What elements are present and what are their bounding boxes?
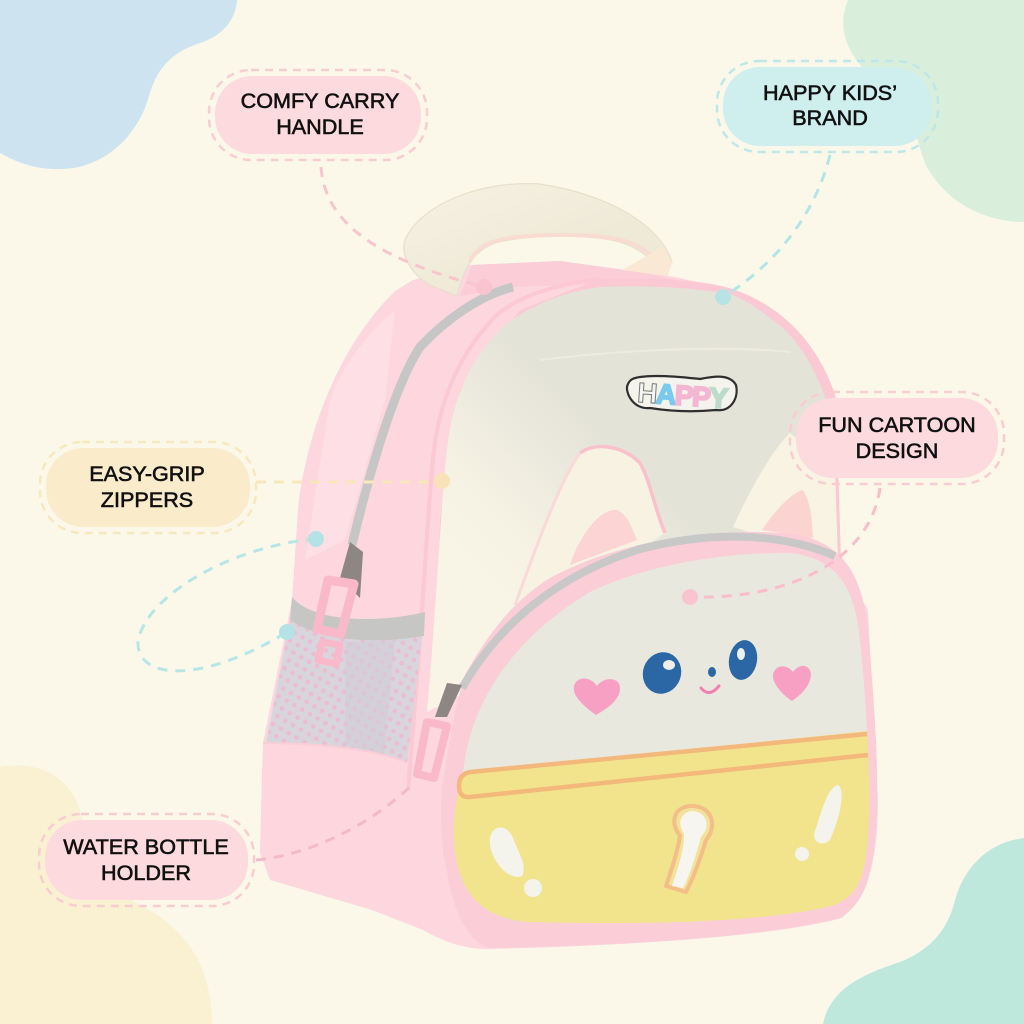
pocket yellow band — [454, 731, 869, 923]
callout: happy kids brand: BRAND — [792, 105, 868, 130]
highlights left — [490, 828, 542, 897]
callout leader: cartoon design — [682, 488, 880, 605]
pocket orange stripes — [459, 734, 868, 797]
callout: easy-grip zippers — [40, 442, 256, 533]
callout: water bottle holder — [39, 814, 254, 906]
main front panel — [427, 286, 838, 712]
callout leader: handle — [321, 167, 492, 295]
pocket zipper — [462, 537, 835, 688]
callout: comfy carry handle — [209, 70, 427, 160]
callout leader: zippers — [256, 473, 450, 489]
callout: comfy carry handle: HANDLE — [276, 114, 364, 139]
handle — [404, 184, 672, 296]
callout: water bottle holder: WATER BOTTLE — [63, 834, 229, 859]
main zipper — [352, 287, 513, 545]
callout leader: water bottle — [256, 785, 412, 860]
callout leader: brand — [715, 155, 830, 305]
background blob: top left blue — [0, 0, 237, 169]
callout: fun cartoon design: FUN CARTOON — [818, 412, 976, 437]
keyhole — [666, 806, 712, 892]
side fold highlights — [305, 310, 395, 560]
callout: water bottle holder: HOLDER — [101, 860, 191, 885]
face: mouth — [701, 686, 719, 693]
callout: fun cartoon design — [790, 392, 1004, 484]
side mesh pocket — [260, 597, 425, 910]
callout: happy kids brand: HAPPY KIDS’ — [763, 80, 897, 105]
zipper pull upper — [317, 542, 363, 664]
body silhouette — [260, 261, 878, 949]
callout leader: mesh loop — [138, 531, 324, 671]
backpack illustration — [260, 184, 878, 949]
callout: happy kids brand — [717, 61, 938, 152]
zipper pull lower — [417, 683, 462, 778]
front pocket border — [441, 532, 877, 948]
front pocket face — [454, 553, 869, 923]
callout: fun cartoon design: DESIGN — [856, 438, 938, 463]
main front piping — [408, 279, 600, 790]
highlights right — [795, 785, 842, 861]
face: left heart — [574, 678, 620, 715]
background blob: top right green — [843, 0, 1024, 222]
panel wrinkle — [540, 349, 790, 360]
background blob: bottom right teal — [823, 838, 1024, 1024]
background blob: bottom left cream — [0, 765, 212, 1024]
top panel — [460, 261, 690, 296]
brand logo: HAPPY — [636, 377, 729, 414]
ear: left — [515, 447, 665, 605]
pocket base — [260, 743, 407, 910]
face: right eye — [726, 638, 760, 682]
ear: right — [733, 433, 838, 560]
callout: easy-grip zippers: ZIPPERS — [101, 487, 193, 512]
face: nose — [708, 667, 716, 677]
face: right heart — [773, 666, 811, 701]
callout: comfy carry handle: COMFY CARRY — [241, 88, 399, 113]
main front panel edge — [436, 279, 841, 700]
callout: easy-grip zippers: EASY-GRIP — [89, 461, 205, 486]
face: left eye — [637, 647, 687, 699]
